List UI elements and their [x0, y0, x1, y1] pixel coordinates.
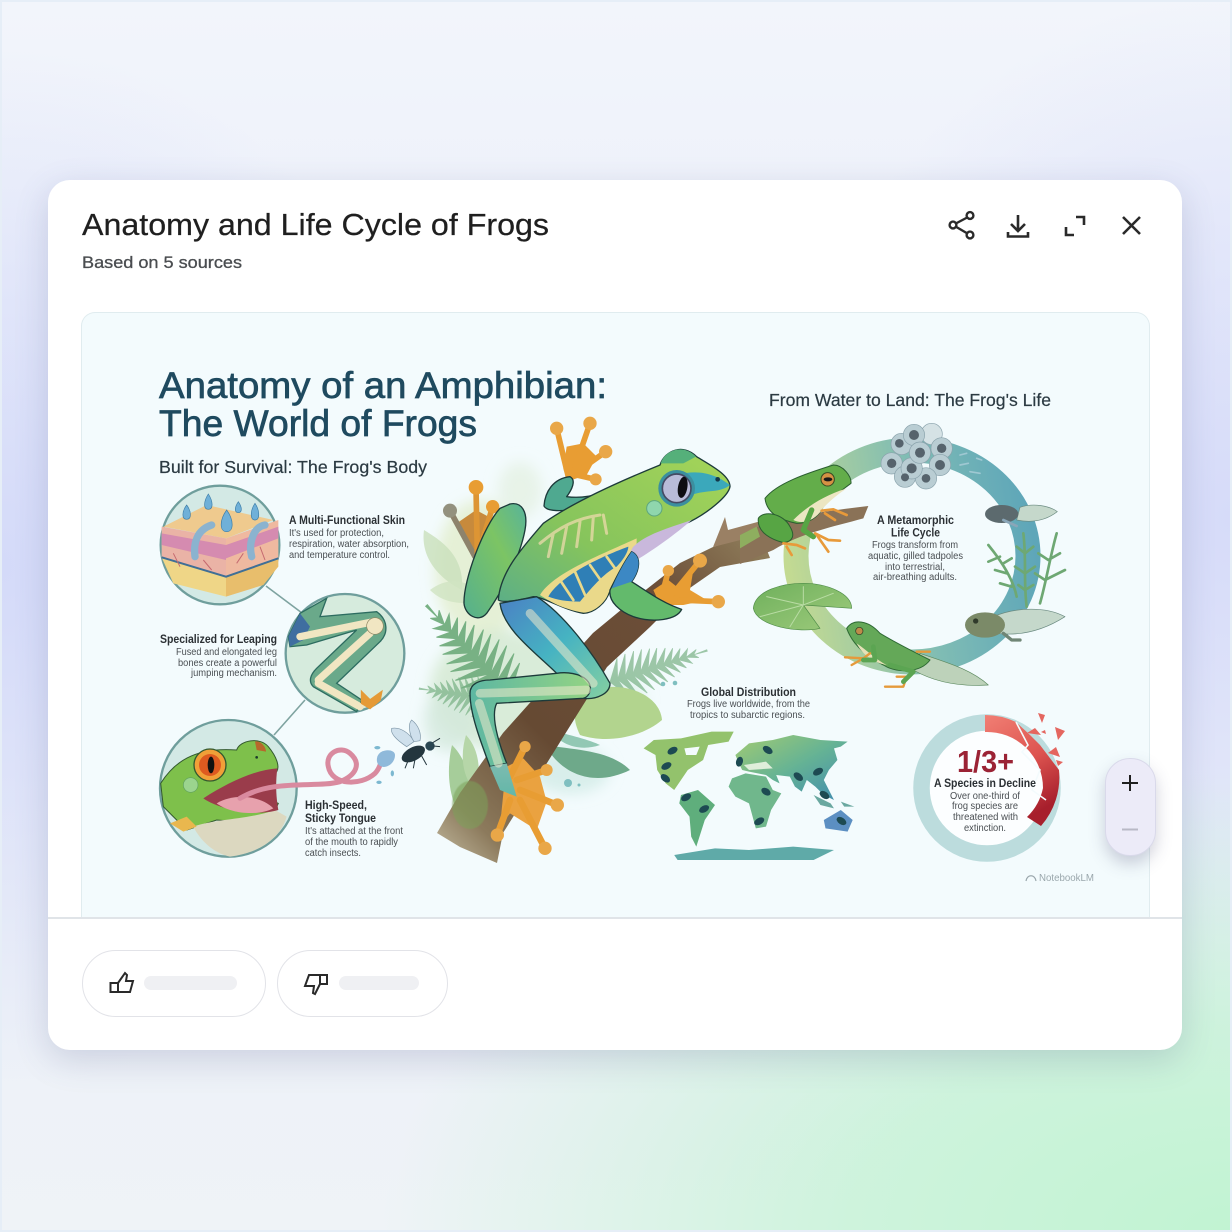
icon: fullscreen: [1066, 217, 1084, 235]
illustration: main frog on branch: [404, 417, 770, 863]
right hand: [653, 554, 725, 608]
icon: thumbs up: [110, 973, 133, 992]
text: specialized for leaping: jumping mechanism.: [190, 668, 277, 679]
eardrum: [647, 501, 662, 516]
text: metamorphic life cycle: into terrestrial,: [885, 562, 945, 573]
big stat: 1/3+: [957, 744, 1014, 779]
young tadpole: [985, 505, 1057, 526]
fern fronds: [404, 584, 714, 721]
tree branch: [437, 532, 770, 863]
world map: [644, 732, 854, 860]
leg bones: [479, 613, 593, 763]
text: specialized for leaping: Specialized for Leaping: [160, 634, 277, 646]
panel: skin: [161, 486, 279, 604]
body: [498, 449, 730, 613]
text: multi-functional skin: [289, 515, 409, 561]
leg skin: [288, 598, 386, 712]
hind foot: [491, 741, 564, 855]
frog artwork in zoomed coordinates: [443, 417, 730, 855]
footer divider: [48, 917, 1182, 919]
frog portrait: [161, 741, 287, 857]
frog markers: [659, 744, 848, 827]
right arm: [610, 552, 682, 620]
tarsus fill: [490, 763, 517, 797]
stat description: frog species are: [952, 801, 1019, 812]
text: global distribution: Global Distribution: [701, 687, 796, 699]
text: high-speed tongue: It's attached at the front: [305, 826, 403, 837]
chest shading: [629, 520, 692, 563]
stat description: [950, 791, 1020, 834]
infographic title: Anatomy of an Amphibian:: [159, 365, 607, 406]
text: high-speed tongue: Sticky Tongue: [305, 813, 376, 825]
donut chart: species decline: [922, 713, 1065, 854]
side blue patches: [548, 547, 628, 602]
text: metamorphic life cycle: [868, 515, 963, 583]
header title: Anatomy and Life Cycle of Frogs: [82, 207, 549, 242]
text: specialized for leaping: [160, 634, 277, 679]
life cycle stages: [740, 423, 1065, 687]
hind leg shin: [470, 673, 590, 767]
text: multi-functional skin: It's used for protection,: [289, 528, 384, 539]
water plants: [988, 533, 1065, 607]
icon: download: [1008, 215, 1028, 236]
branch twig: [713, 517, 765, 547]
text: high-speed tongue: catch insects.: [305, 848, 361, 859]
infographic title: [159, 365, 607, 444]
hind leg thigh: [500, 597, 610, 699]
modal card: [48, 180, 1182, 1050]
life cycle ring: [796, 450, 1028, 662]
sticky tip: [377, 750, 395, 767]
text: multi-functional skin: A Multi-Functional Skin: [289, 515, 405, 527]
placeholder label up: [144, 976, 237, 990]
head stripe: [677, 472, 730, 495]
orange toes: [362, 692, 382, 708]
text: metamorphic life cycle: aquatic, gilled tadpoles: [868, 551, 963, 562]
adult frog: [758, 465, 851, 555]
text: species in decline: [934, 744, 1036, 834]
icon: close: [1123, 217, 1140, 234]
froglet: [845, 622, 988, 687]
belly: [540, 538, 637, 613]
patch lines: [560, 557, 615, 600]
text: high-speed tongue: High-Speed,: [305, 800, 367, 812]
threatened segment: [985, 715, 1059, 826]
text: metamorphic life cycle: air-breathing adults.: [873, 572, 957, 583]
branch end: [740, 506, 868, 564]
watermark: NotebookLM: [1039, 873, 1094, 884]
section heading: life cycle: From Water to Land: The Frog's Life: [769, 390, 1051, 410]
text: multi-functional skin: respiration, water absorption,: [289, 539, 409, 550]
stat description: threatened with: [953, 812, 1018, 823]
eggs: [881, 423, 952, 489]
text: multi-functional skin: and temperature control.: [289, 550, 390, 561]
tongue: [240, 750, 385, 798]
eye: [658, 470, 695, 507]
droplets: [374, 746, 394, 784]
shards: [1027, 713, 1065, 766]
text: global distribution: tropics to subarctic regions.: [690, 710, 805, 721]
panel: tongue: [160, 720, 440, 857]
moss: [740, 527, 760, 548]
icon: thumbs down: [305, 975, 327, 994]
nostril: [715, 477, 720, 482]
thumbs down button: [277, 950, 448, 1017]
skin cross-section: [162, 505, 278, 597]
upper right arm blue: [612, 552, 639, 588]
older tadpole: [965, 609, 1065, 640]
text: specialized for leaping: bones create a powerful: [178, 658, 277, 669]
eye bump: [661, 449, 696, 463]
water spots: [564, 681, 677, 787]
infographic title: The World of Frogs: [159, 403, 477, 444]
water droplets: [183, 494, 259, 532]
left hand: [443, 480, 499, 563]
moss patch: [452, 781, 488, 829]
connector lines: [266, 586, 305, 735]
text: global distribution: [687, 687, 811, 721]
top hand: [550, 417, 612, 485]
placeholder label down: [339, 976, 419, 990]
leaves: [424, 530, 662, 825]
section heading: body: Built for Survival: The Frog's Body: [159, 457, 427, 477]
watercolor foliage wash: [424, 462, 645, 794]
stat description: Over one-third of: [950, 791, 1020, 802]
leg circle: [286, 594, 404, 713]
fly: [391, 720, 440, 768]
zoom control: [1105, 758, 1156, 856]
left arm: [464, 504, 526, 618]
text: metamorphic life cycle: A Metamorphic: [877, 515, 955, 527]
panel: leaping leg: [286, 594, 404, 713]
crack gaps: [1016, 722, 1046, 800]
text: specialized for leaping: Fused and elongated leg: [176, 647, 277, 658]
top arm: [544, 477, 600, 511]
icon: share: [950, 212, 973, 238]
text: high-speed tongue: of the mouth to rapidly: [305, 837, 398, 848]
leg bones: [300, 622, 373, 707]
text: metamorphic life cycle: Life Cycle: [891, 528, 940, 540]
continents: [644, 732, 854, 860]
text: global distribution: Frogs live worldwide, from the: [687, 699, 811, 710]
rib lines: [540, 515, 607, 557]
leg blue accent: [288, 613, 310, 647]
text: high-speed tongue: [305, 800, 403, 859]
infographic panel background: [81, 312, 1150, 918]
thumbs up button: [82, 950, 266, 1017]
stat heading: A Species in Decline: [934, 778, 1036, 790]
skin circle: [161, 486, 279, 604]
lily pad: [753, 583, 852, 630]
knee joint: [367, 618, 383, 634]
stat description: extinction.: [964, 823, 1006, 834]
text: metamorphic life cycle: Frogs transform from: [872, 540, 958, 551]
header subtitle: Based on 5 sources: [82, 254, 242, 272]
ripples: [960, 453, 982, 473]
donut base ring: [922, 722, 1052, 854]
tongue circle: [160, 720, 297, 857]
